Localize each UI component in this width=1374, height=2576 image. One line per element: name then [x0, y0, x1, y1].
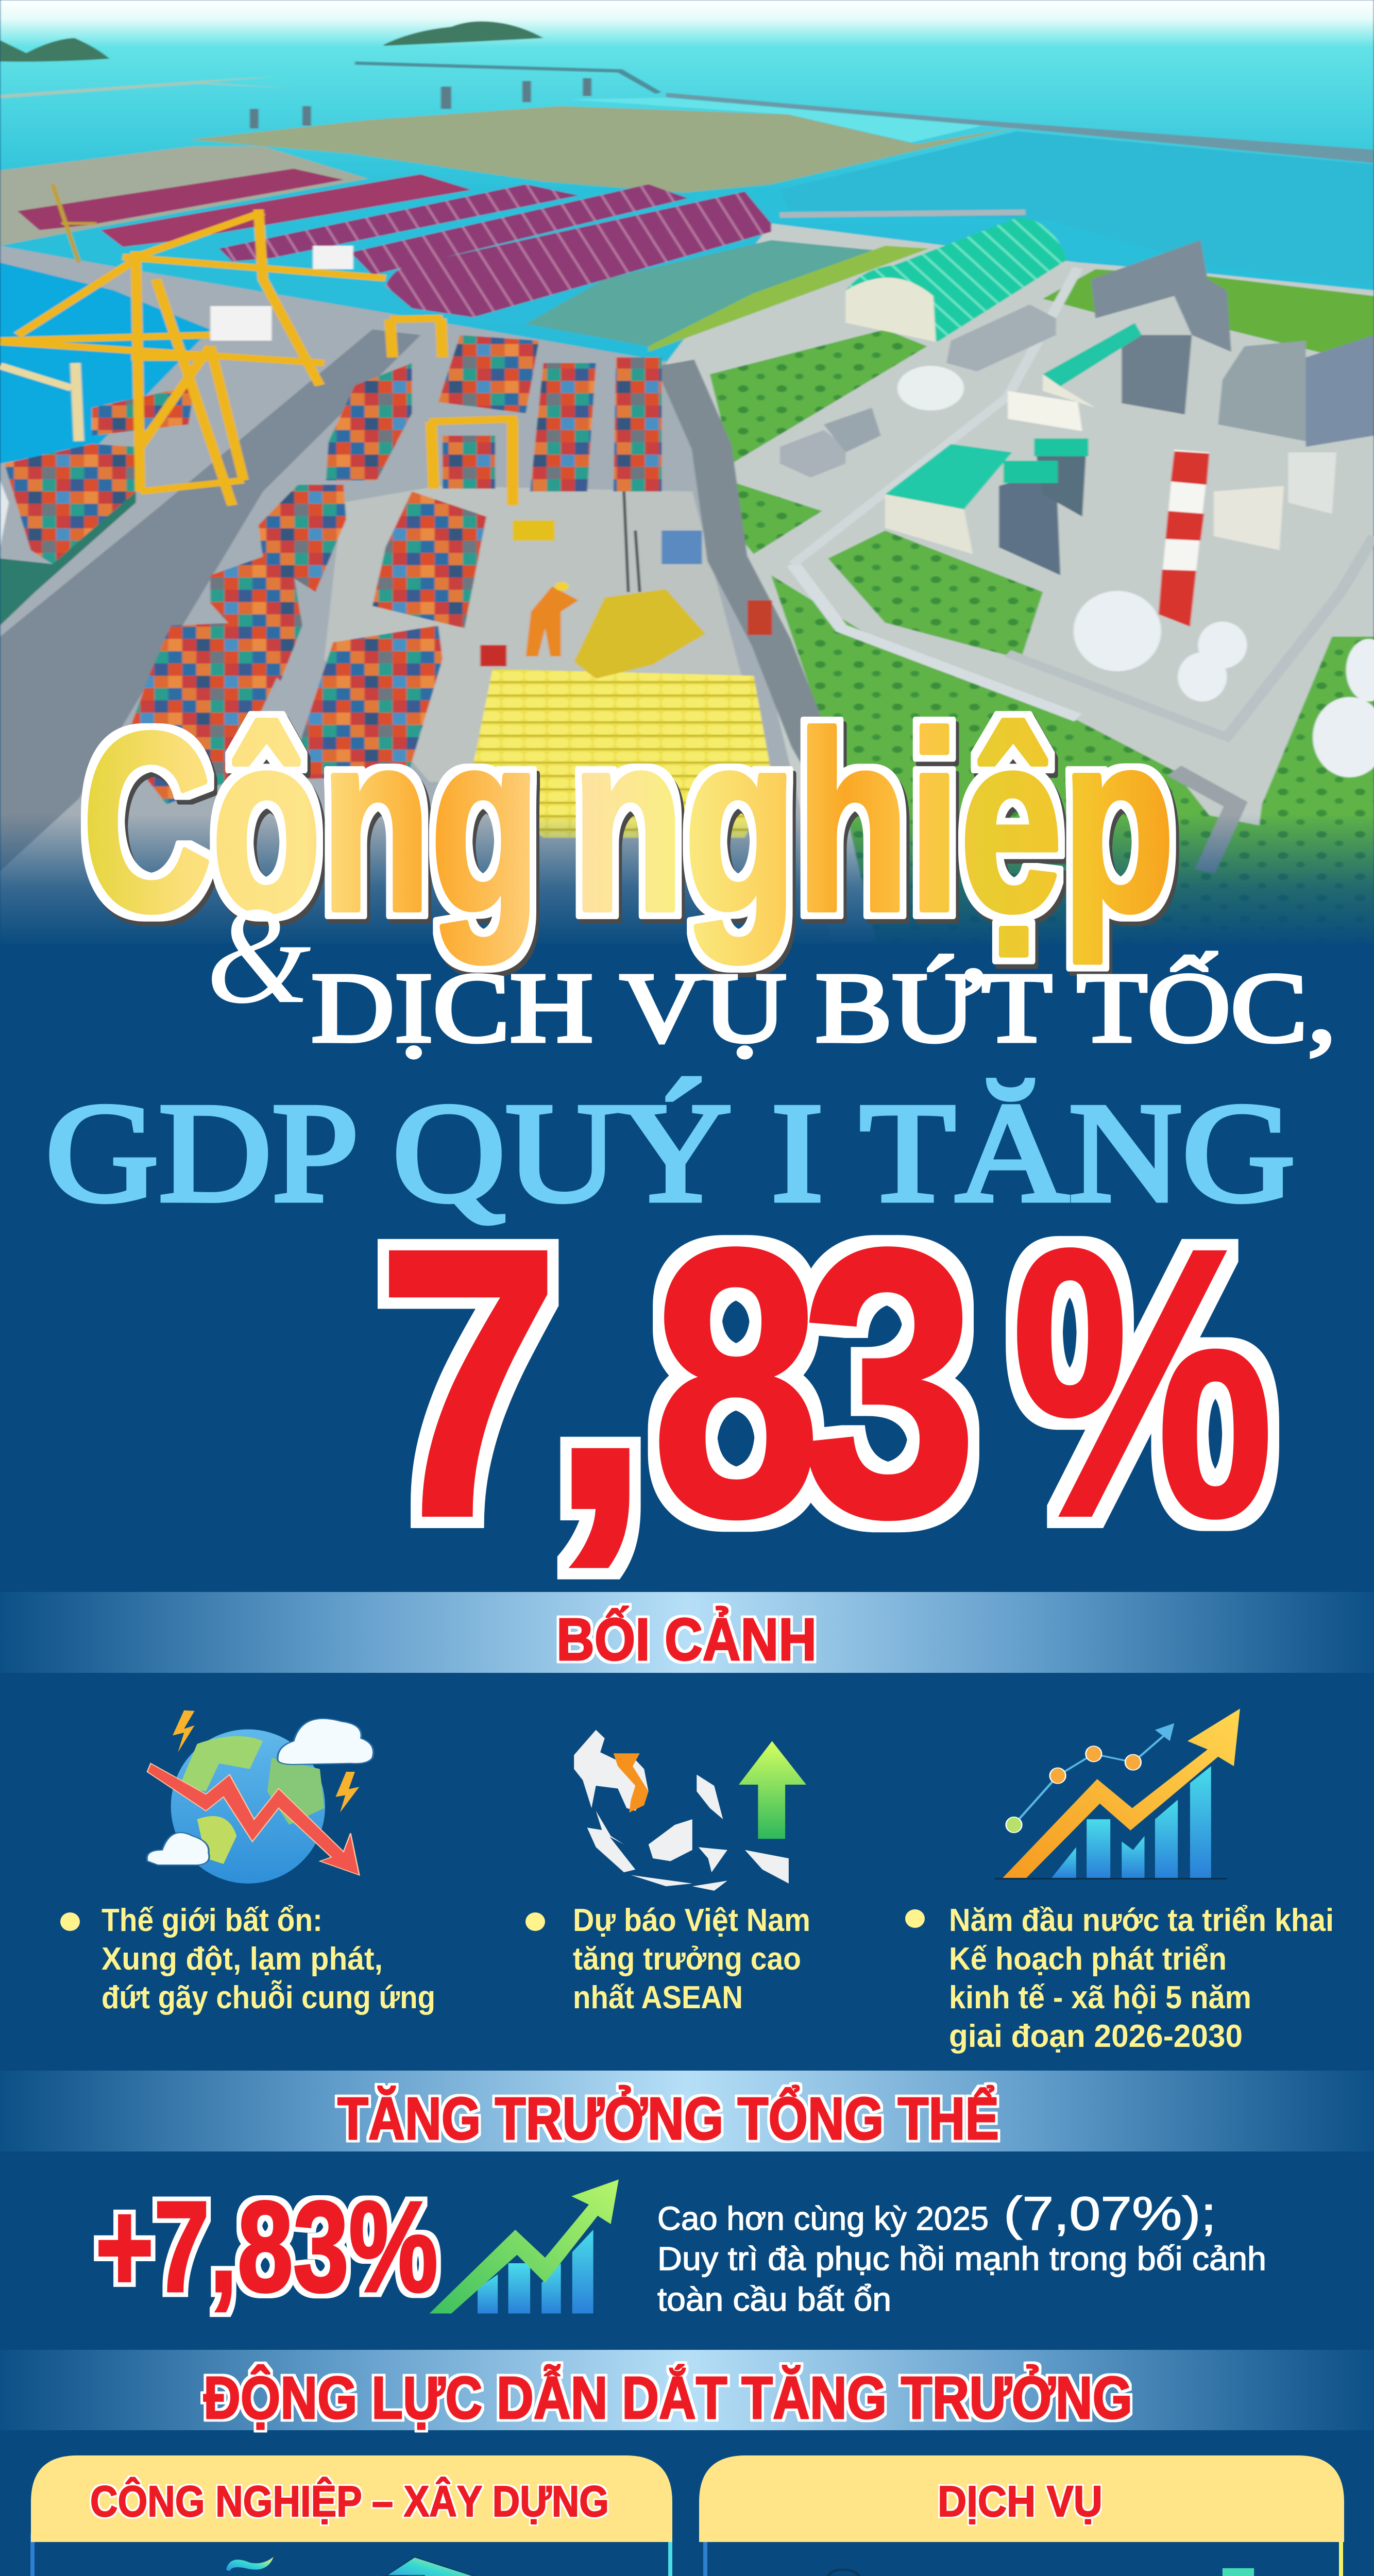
panel: Công nghiệp – Xây dựng [31, 2455, 672, 2576]
context item: world instability: Xung đột, lạm phát, [101, 1941, 383, 1977]
title: 7,83%: , [547, 1162, 653, 1588]
context item: five-year plan: giai đoạn 2026-2030 [949, 2019, 1243, 2054]
title: DỊCH VỤ BỨT TỐC: DỊCH VỤ BỨT TỐC, [311, 952, 1336, 1063]
section band: Tăng trưởng tổng thể: TĂNG TRƯỞNG TỔNG THỂ [337, 2085, 999, 2152]
title: 7,83%: 3 [800, 1170, 978, 1596]
context item: five-year plan: kinh tế - xã hội 5 năm [949, 1980, 1251, 2015]
icon: Southeast Asia map with up arrow [574, 1730, 806, 1891]
title: GDP QUÝ I TĂNG: GDP QUÝ I TĂNG [45, 1074, 1295, 1231]
context item: Vietnam forecast: Dự báo Việt Nam [573, 1903, 810, 1938]
context item: world instability: Thế giới bất ổn: [101, 1903, 323, 1938]
icon: office building [1176, 2568, 1305, 2576]
context item: five-year plan: Năm đầu nước ta triển khai [949, 1903, 1334, 1938]
section band: Bối cảnh: BỐI CẢNH [556, 1606, 817, 1673]
icon: tower crane [383, 2557, 490, 2576]
big number +7,83%: +7,83% [95, 2175, 438, 2318]
icon: globe with falling arrow [147, 1710, 374, 1884]
icon: factory [215, 2557, 319, 2576]
title: 7,83%: % [1011, 1170, 1274, 1596]
title: 7,83%: 7 [377, 1170, 560, 1596]
fade to navy [0, 814, 1374, 948]
overall growth description [657, 2188, 1266, 2318]
overall growth description: (7,07%); [1004, 2188, 1216, 2240]
hero photo: port and power plant [0, 0, 1374, 948]
context item: Vietnam forecast [525, 1903, 810, 2015]
context item: world instability [60, 1903, 435, 2015]
title: 7,83%: 8 [651, 1170, 821, 1596]
title: ampersand: & [206, 878, 312, 1032]
title: Công nghiệp: Công [82, 681, 540, 964]
panel: Dịch vụ [699, 2455, 1344, 2576]
section band: Động lực dẫn dắt tăng trưởng: ĐỘNG LỰC DẪN DẮT TĂNG TRƯỞNG [203, 2364, 1132, 2431]
section band: Tăng trưởng tổng thể [0, 2071, 1374, 2152]
icon: shopping bags [789, 2570, 926, 2576]
overall growth description: Cao hơn cùng kỳ 2025 [657, 2200, 989, 2237]
section band: Động lực dẫn dắt tăng trưởng [0, 2350, 1374, 2431]
panel: Dịch vụ: DỊCH VỤ [938, 2477, 1102, 2526]
icon: rising chart [995, 1709, 1240, 1879]
context item: world instability: đứt gãy chuỗi cung ứng [101, 1980, 435, 2015]
context item: Vietnam forecast: nhất ASEAN [573, 1980, 743, 2015]
overall growth description: toàn cầu bất ổn [657, 2281, 891, 2318]
title: Công nghiệp [82, 681, 1175, 964]
overall growth description: Duy trì đà phục hồi mạnh trong bối cảnh [657, 2240, 1266, 2277]
section band: Bối cảnh [0, 1592, 1374, 1673]
panel: Công nghiệp – Xây dựng: CÔNG NGHIỆP – XÂY DỰNG [90, 2477, 609, 2526]
context item: five-year plan [905, 1903, 1334, 2054]
icon: green growth chart [429, 2179, 619, 2313]
title: 7,83% [377, 1162, 1274, 1596]
context item: Vietnam forecast: tăng trưởng cao [573, 1941, 801, 1977]
context item: five-year plan: Kế hoạch phát triển [949, 1941, 1227, 1977]
